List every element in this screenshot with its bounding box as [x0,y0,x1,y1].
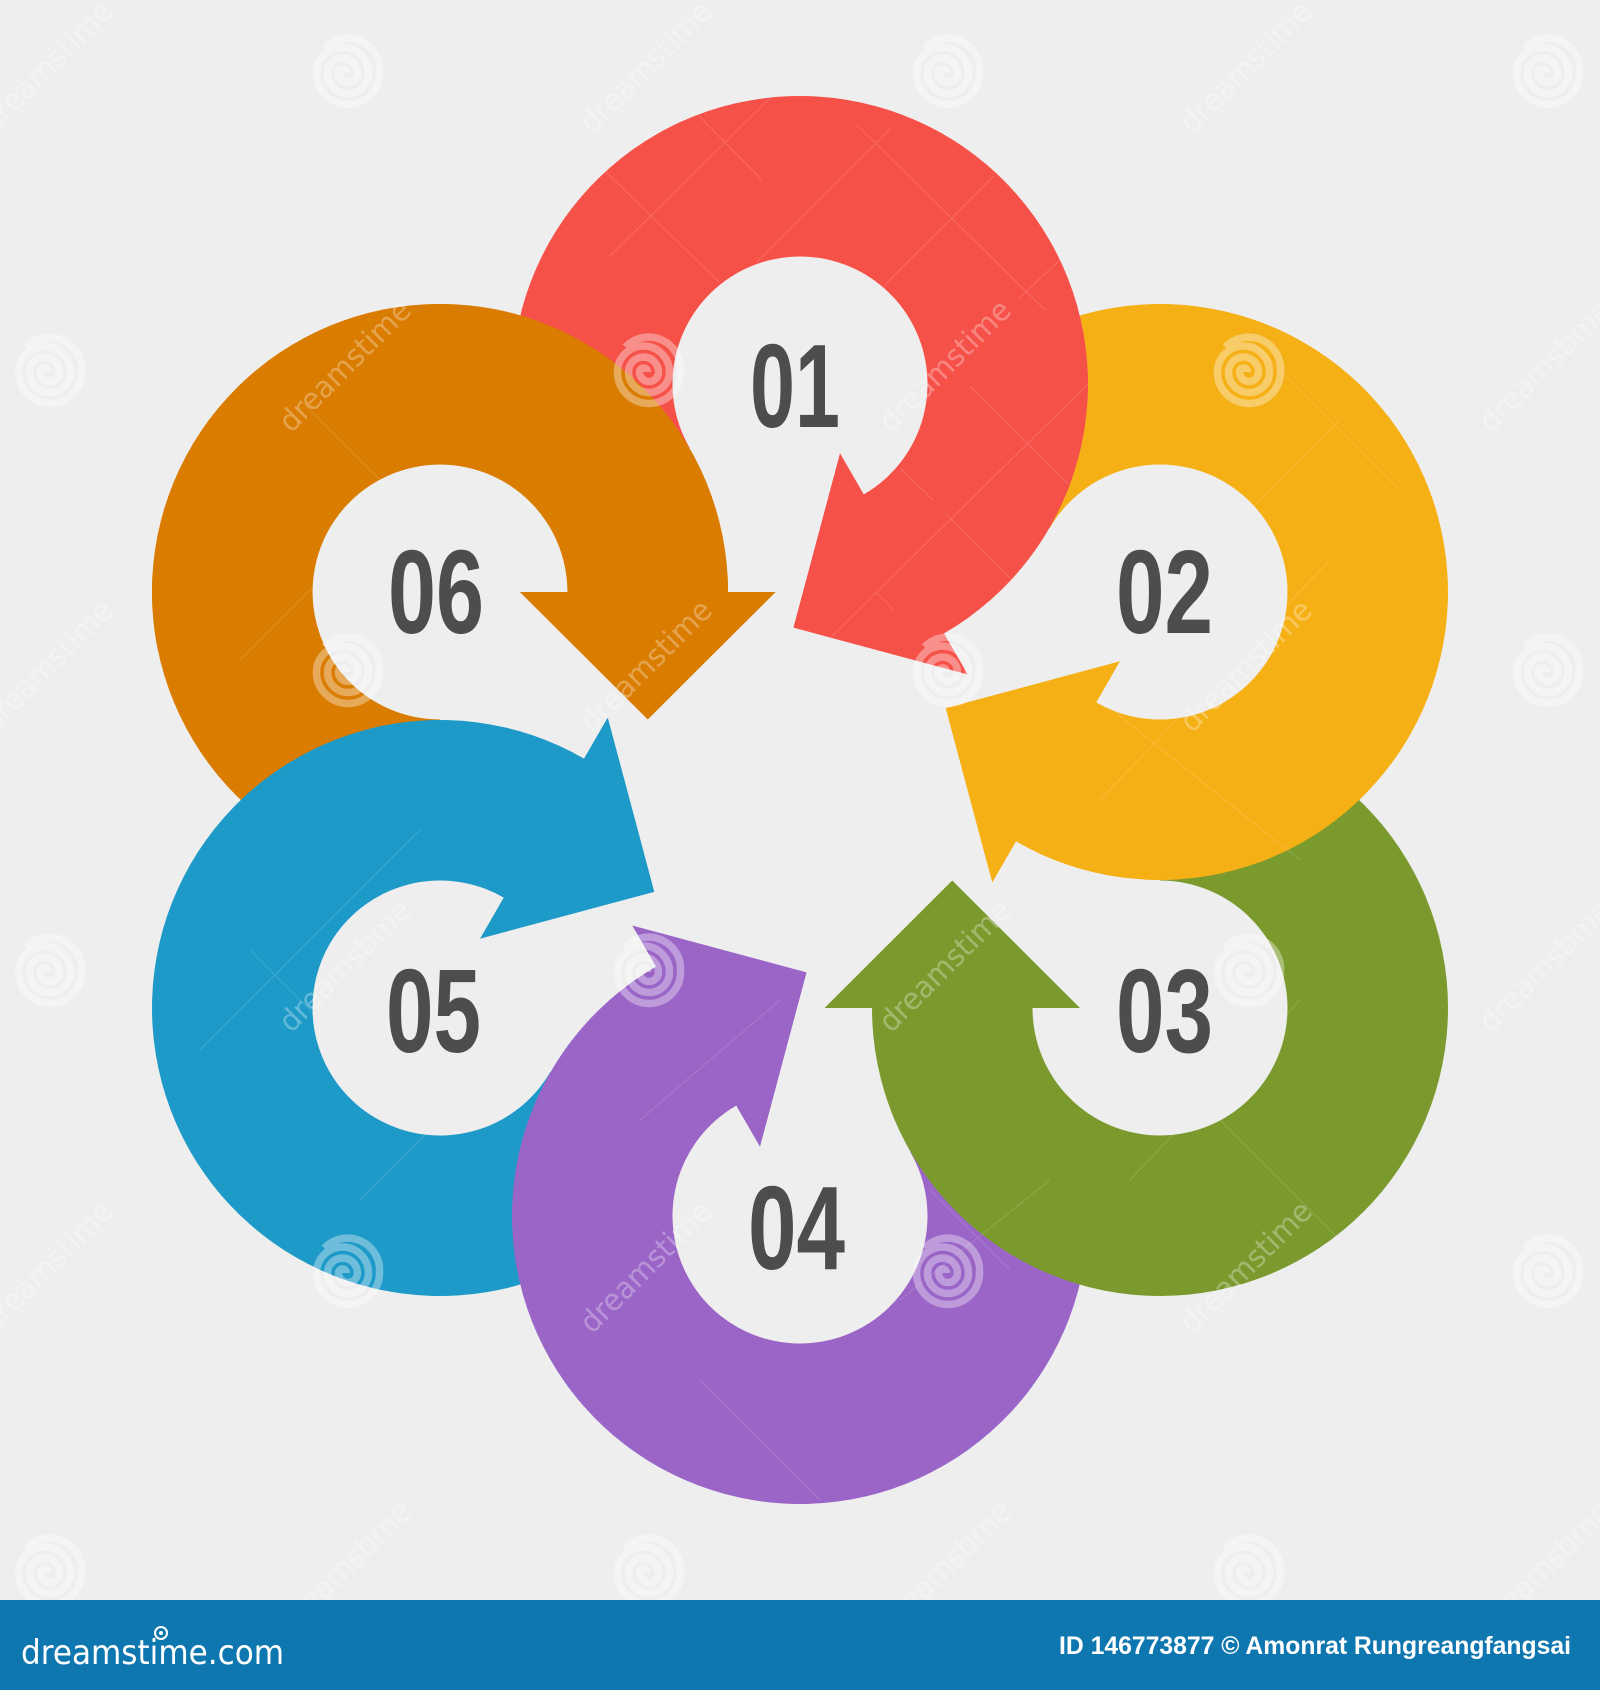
footer bar [0,1600,1600,1690]
watermark wordmarks: dreamstime [573,593,719,739]
number 01: 01 [750,320,840,453]
arrow 03 green [824,720,1448,1296]
watermark wordmarks: dreamstime [272,1494,418,1640]
number 03: 03 [1116,945,1213,1078]
watermark wordmarks: dreamstime [1173,1194,1319,1340]
number 02: 02 [1116,526,1213,659]
watermark wordmarks: dreamstime [573,1194,719,1340]
watermark wordmarks: dreamstime [272,893,418,1039]
watermark wordmarks: dreamstime [1173,593,1319,739]
footer credit: ID 146773877 © Amonrat Rungreangfangsai [1059,1632,1571,1660]
arrow 01 red [407,0,1217,819]
footer logo: dreamstime.com [21,1633,284,1673]
arrow 06 orange overlap above red [152,304,776,650]
watermark wordmarks: dreamstime [872,1494,1018,1640]
watermark wordmarks: dreamstime [872,893,1018,1039]
arrow 05 blue [47,573,857,1401]
arrow 04 purple [383,781,1193,1609]
watermark wordmarks: dreamstime [872,293,1018,439]
arrow 02 yellow [743,199,1553,1027]
watermark wordmarks: dreamstime [272,293,418,439]
arrow 06 orange [152,304,776,880]
number 04: 04 [748,1162,845,1295]
number 05: 05 [386,945,481,1078]
number 06: 06 [388,526,484,659]
